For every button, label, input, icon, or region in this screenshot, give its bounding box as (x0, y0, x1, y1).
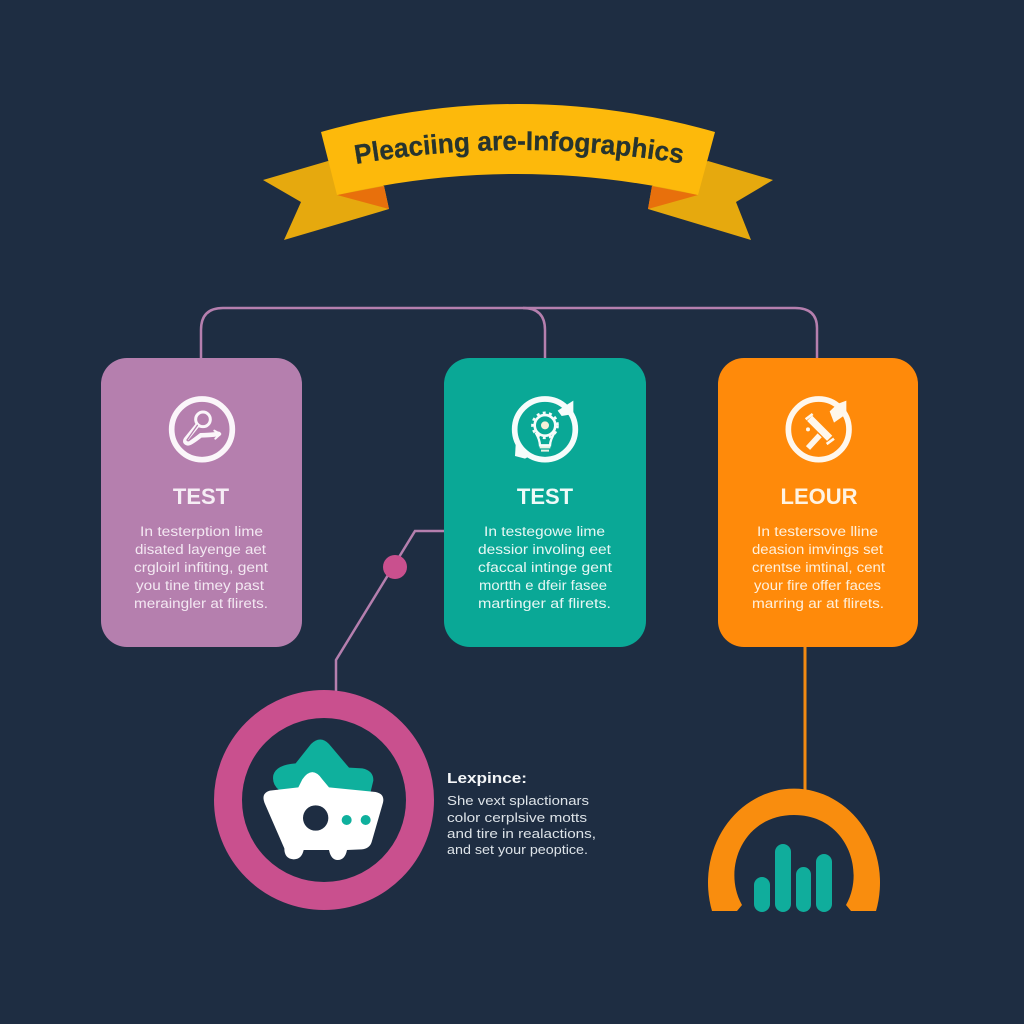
body text: mortth e dfeir fasee (479, 578, 607, 593)
body text: cfaccal intinge gent (478, 560, 612, 575)
icon: bulb with gear (515, 399, 575, 460)
panel: purple card (101, 358, 302, 647)
callout body: She vext splactionars (447, 793, 590, 808)
body text: your fire offer faces (754, 578, 881, 593)
body text (478, 524, 612, 611)
body text: In testerption lime (140, 524, 263, 539)
body text: crentse imtinal, cent (752, 560, 885, 575)
callout body (447, 793, 596, 857)
connector: top branches (201, 308, 817, 358)
banner right tail (648, 161, 773, 240)
body text: meraingler at flirets. (134, 596, 268, 611)
body text: In testegowe lime (484, 524, 605, 539)
banner left fold (337, 186, 389, 209)
title: Pleaciing are-Infographics (354, 131, 683, 164)
body text: In testersove lline (757, 524, 878, 539)
body text: you tine timey past (136, 578, 264, 593)
gauge with bar chart (708, 789, 880, 912)
body text: martinger af flirets. (478, 596, 611, 611)
icon: cart (263, 739, 383, 860)
connector: teal card to ring (336, 531, 444, 692)
callout heading: Lexpince: (447, 770, 527, 787)
callout text (447, 770, 596, 857)
panel: orange card (718, 358, 918, 647)
gauge arc (708, 789, 880, 911)
bar chart (754, 844, 832, 912)
pink ring with cart icon (228, 704, 420, 896)
banner main band (321, 104, 715, 195)
panel: teal card (444, 358, 646, 647)
body text (752, 524, 885, 611)
body text (134, 524, 268, 611)
body text: disated layenge aet (135, 542, 266, 557)
heading: TEST (173, 484, 230, 509)
banner left tail (263, 161, 389, 240)
callout body: color cerplsive motts (447, 810, 588, 825)
callout body: and set your peoptice. (447, 842, 588, 857)
callout body: and tire in realactions, (447, 826, 596, 841)
connector: orange card to gauge (804, 647, 806, 790)
body text: deasion imvings set (752, 542, 883, 557)
connector node (383, 555, 407, 579)
icon: magnifier (172, 399, 232, 460)
body text: marring ar at flirets. (752, 596, 884, 611)
body text: crgloirl infiting, gent (134, 560, 268, 575)
title banner (263, 104, 773, 240)
body text: dessior involing eet (478, 542, 611, 557)
icon: crossed tools (788, 399, 849, 460)
heading: TEST (517, 484, 574, 509)
heading: LEOUR (780, 484, 858, 509)
banner right fold (648, 186, 698, 209)
